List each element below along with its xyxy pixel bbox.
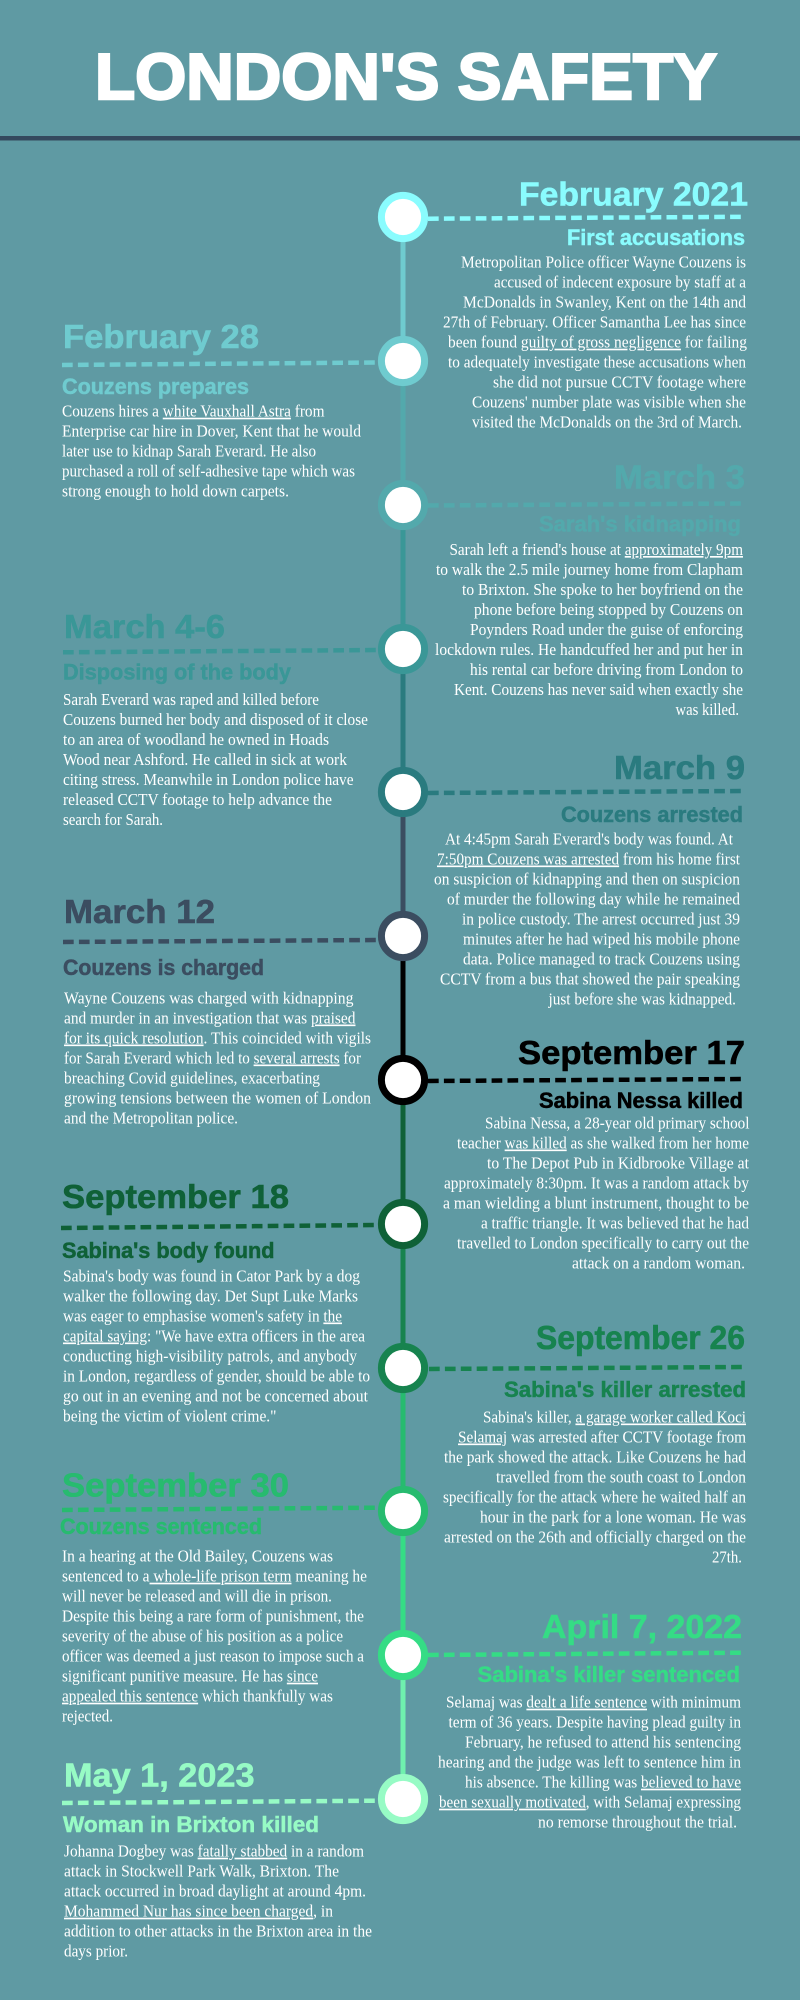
node [381, 1777, 425, 1821]
event: April 7, 2022 [381, 1609, 742, 1832]
body text: appealed this sentence which thankfully was [62, 1687, 333, 1706]
body text [434, 830, 741, 1008]
body text: his rental car before driving from London to [470, 660, 743, 679]
subheading: Sabina Nessa killed [539, 1088, 743, 1113]
connector [428, 1653, 741, 1655]
body text: arrested on the 26th and officially charged on the [444, 1528, 746, 1546]
node [381, 1346, 425, 1390]
body text: Despite this being a rare form of punishment, the [62, 1607, 364, 1626]
body text: later use to kidnap Sarah Everard. He also [62, 442, 316, 461]
date: March 3 [614, 459, 745, 496]
body text: Metropolitan Police officer Wayne Couzens is [461, 253, 746, 272]
body text: to walk the 2.5 mile journey home from Clapham [436, 560, 743, 579]
node [381, 627, 425, 671]
subheading: Couzens arrested [561, 802, 743, 827]
subheading: Couzens sentenced [60, 1514, 262, 1539]
body text: citing stress. Meanwhile in London police have [63, 770, 354, 789]
event: March 9 [381, 750, 745, 1008]
event: March 12 [63, 894, 425, 1128]
body text: In a hearing at the Old Bailey, Couzens was [62, 1547, 333, 1566]
body text [435, 540, 743, 719]
subheading: Woman in Brixton killed [63, 1812, 319, 1837]
body text: on suspicion of kidnapping and then on suspicion [434, 870, 740, 888]
date: September 30 [62, 1467, 289, 1504]
body text: addition to other attacks in the Brixton area in the [64, 1922, 372, 1941]
body text: purchased a roll of self-adhesive tape which was [62, 462, 355, 481]
body text: been sexually motivated, with Selamaj expressing [439, 1793, 741, 1812]
date: March 9 [614, 750, 745, 787]
date: February 28 [63, 319, 259, 356]
body text: to an area of woodland he owned in Hoads [63, 730, 329, 749]
node [381, 914, 425, 958]
body text: Sabina's body was found in Cator Park by a dog [63, 1266, 360, 1286]
body text: Kent. Couzens has never said when exactly she [454, 680, 743, 699]
body text: CCTV from a bus that showed the pair speaking [440, 970, 740, 988]
body text: term of 36 years. Despite having plead guilty in [448, 1713, 741, 1732]
connector [428, 504, 741, 506]
body text: days prior. [64, 1942, 128, 1961]
body text [63, 1266, 370, 1426]
body text: the park showed the attack. Like Couzens he had [444, 1448, 747, 1466]
node [381, 1058, 425, 1102]
body text: was eager to emphasise women's safety in the [63, 1306, 342, 1326]
node [381, 339, 425, 383]
body text: growing tensions between the women of London [64, 1088, 371, 1108]
body text [63, 690, 368, 829]
body text: McDonalds in Swanley, Kent on the 14th and [463, 293, 747, 312]
connector [428, 217, 743, 219]
event: September 18 [61, 1179, 425, 1426]
body text: rejected. [62, 1707, 113, 1726]
node [381, 483, 425, 527]
body text: February, he refused to attend his sentencing [465, 1733, 741, 1752]
connector [62, 1801, 378, 1803]
body text: approximately 8:30pm. It was a random attack by [444, 1174, 750, 1192]
body text [443, 1408, 747, 1566]
connector [429, 1367, 744, 1369]
body text [62, 1547, 367, 1726]
body text: go out in an evening and not be concerned about [63, 1386, 368, 1406]
event: May 1, 2023 [62, 1758, 425, 1961]
body text: attack in Stockwell Park Walk, Brixton. The [64, 1862, 339, 1881]
body text: 7:50pm Couzens was arrested from his home first [437, 850, 740, 868]
connector [61, 1225, 377, 1228]
body text: been found guilty of gross negligence for failing [448, 333, 747, 352]
subheading: Couzens is charged [63, 955, 264, 980]
event: February 28 [62, 319, 425, 501]
node [381, 1489, 425, 1533]
body text: travelled to London specifically to carry out the [457, 1234, 749, 1252]
body text: Poynders Road under the guise of enforcing [470, 620, 743, 639]
body text: will never be released and will die in prison. [62, 1587, 332, 1606]
body text: for its quick resolution. This coincided with vigils [64, 1028, 371, 1048]
body text: Mohammed Nur has since been charged, in [64, 1902, 333, 1921]
node [381, 770, 425, 814]
body text: was killed. [676, 700, 739, 719]
body text: Couzens burned her body and disposed of it close [63, 710, 368, 729]
body text: significant punitive measure. He has since [62, 1667, 318, 1686]
body text [443, 1114, 750, 1272]
body text: to Brixton. She spoke to her boyfriend on the [462, 580, 743, 599]
event: September 17 [381, 1035, 750, 1272]
body text: data. Police managed to track Couzens using [463, 950, 740, 968]
body text: Wood near Ashford. He called in sick at work [63, 750, 348, 769]
connector [63, 650, 378, 652]
body text: capital saying: "We have extra officers in the area [63, 1326, 366, 1346]
body text: officer was deemed a just reason to impose such a [62, 1647, 365, 1666]
body text: teacher was killed as she walked from her home [457, 1134, 749, 1152]
date: September 18 [62, 1179, 289, 1216]
body text: to adequately investigate these accusations when [448, 353, 746, 372]
connector [62, 1508, 378, 1510]
connector [63, 940, 378, 942]
event: March 3 [381, 459, 745, 719]
body text: his absence. The killing was believed to have [465, 1773, 741, 1792]
body text [64, 988, 371, 1128]
body text: Couzens' number plate was visible when she [472, 393, 746, 412]
body text: and murder in an investigation that was praised [64, 1008, 356, 1028]
event: September 30 [60, 1467, 425, 1726]
body text: Sarah Everard was raped and killed before [63, 690, 319, 709]
subheading: Sarah's kidnapping [539, 512, 741, 536]
body text: search for Sarah. [63, 810, 163, 829]
date: February 2021 [519, 176, 748, 213]
body text: 27th. [712, 1548, 742, 1566]
subheading: Disposing of the body [63, 660, 292, 684]
header divider [0, 136, 800, 140]
body text: Wayne Couzens was charged with kidnapping [64, 988, 354, 1008]
body text: phone before being stopped by Couzens on [474, 600, 743, 619]
node [381, 1633, 425, 1677]
body text: strong enough to hold down carpets. [62, 482, 289, 501]
date: May 1, 2023 [64, 1758, 254, 1795]
body text: Selamaj was arrested after CCTV footage from [458, 1428, 746, 1446]
date: April 7, 2022 [542, 1609, 742, 1646]
event: March 4-6 [63, 609, 425, 829]
body text: At 4:45pm Sarah Everard's body was found. At [445, 830, 733, 848]
subheading: First accusations [567, 225, 745, 250]
body text: minutes after he had wiped his mobile phone [463, 930, 740, 948]
body text: Selamaj was dealt a life sentence with minimum [446, 1693, 741, 1712]
event: September 26 [381, 1320, 747, 1566]
body text: specifically for the attack where he waited half an [443, 1488, 746, 1506]
connector [428, 791, 741, 793]
timeline spine [400, 217, 406, 1799]
subheading: Sabina's killer sentenced [478, 1662, 740, 1687]
body text: 27th of February. Officer Samantha Lee has since [443, 313, 746, 332]
body text: being the victim of violent crime." [63, 1406, 276, 1426]
node [381, 195, 425, 239]
body text: hearing and the judge was left to sentence him in [438, 1753, 741, 1772]
body text: accused of indecent exposure by staff at a [494, 273, 747, 292]
body text [438, 1693, 741, 1832]
body text: hour in the park for a lone woman. He was [480, 1508, 746, 1526]
body text: visited the McDonalds on the 3rd of March. [472, 413, 742, 432]
date: September 17 [518, 1035, 745, 1072]
connector [62, 362, 378, 365]
body text [443, 253, 747, 432]
body text: Sabina's killer, a garage worker called Koci [483, 1408, 746, 1426]
body text: released CCTV footage to help advance the [63, 790, 332, 809]
subheading: Sabina's body found [62, 1238, 274, 1263]
node [381, 1202, 425, 1246]
body text: Sabina Nessa, a 28-year old primary school [485, 1114, 750, 1132]
body text: conducting high-visibility patrols, and anybody [63, 1346, 358, 1366]
connector [428, 1079, 741, 1081]
date: March 4-6 [64, 609, 225, 646]
body text: attack on a random woman. [572, 1254, 745, 1272]
body text: a man wielding a blunt instrument, thought to be [443, 1194, 749, 1212]
body text: and the Metropolitan police. [64, 1108, 238, 1128]
body text: sentenced to a whole-life prison term meaning he [62, 1567, 367, 1586]
body text: she did not pursue CCTV footage where [493, 373, 746, 392]
subheading: Couzens prepares [62, 374, 249, 399]
body text: no remorse throughout the trial. [538, 1813, 737, 1832]
body text: in London, regardless of gender, should be able to [63, 1366, 370, 1386]
event: February 2021 [381, 176, 748, 432]
body text: Couzens hires a white Vauxhall Astra from [62, 402, 325, 421]
body text: for Sarah Everard which led to several arrests for [64, 1048, 361, 1068]
body text: of murder the following day while he remained [447, 890, 741, 908]
body text: just before she was kidnapped. [548, 990, 736, 1008]
body text [62, 402, 362, 501]
title: LONDON'S SAFETY [95, 41, 717, 113]
body text: in police custody. The arrest occurred just 39 [462, 910, 740, 928]
body text: Sarah left a friend's house at approximately 9pm [450, 540, 743, 559]
body text: breaching Covid guidelines, exacerbating [64, 1068, 320, 1088]
body text: a traffic triangle. It was believed that he had [481, 1214, 750, 1232]
body text: attack occurred in broad daylight at around 4pm. [64, 1882, 366, 1901]
body text: travelled from the south coast to London [496, 1468, 746, 1486]
subheading: Sabina's killer arrested [504, 1377, 746, 1402]
body text: Enterprise car hire in Dover, Kent that he would [62, 422, 362, 441]
date: September 26 [536, 1320, 745, 1357]
body text: Johanna Dogbey was fatally stabbed in a random [64, 1842, 364, 1861]
body text: lockdown rules. He handcuffed her and put her in [435, 640, 743, 659]
date: March 12 [64, 894, 215, 931]
body text [64, 1842, 372, 1961]
body text: to The Depot Pub in Kidbrooke Village at [487, 1154, 749, 1172]
body text: walker the following day. Det Supt Luke Marks [63, 1286, 358, 1306]
body text: severity of the abuse of his position as a police [62, 1627, 343, 1646]
